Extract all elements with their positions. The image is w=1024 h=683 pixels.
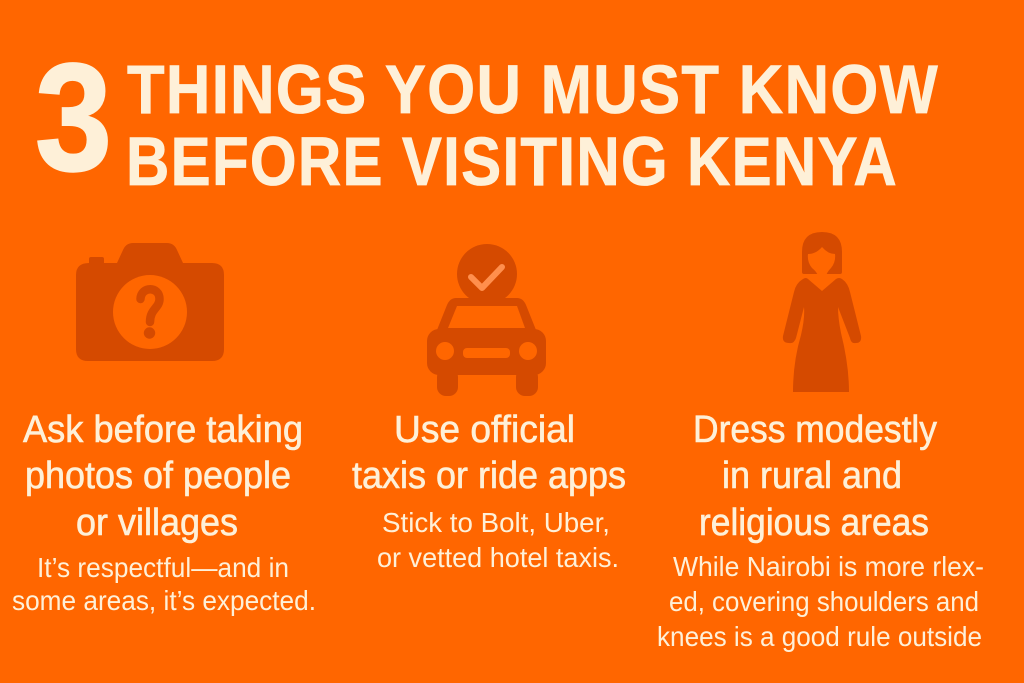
panel: tip 3 bbox=[657, 409, 984, 652]
title line 1: THINGS YOU MUST KNOW bbox=[127, 51, 939, 128]
panel: tip 2 bbox=[352, 409, 626, 573]
title bbox=[35, 32, 939, 203]
car bbox=[427, 298, 546, 396]
tip 3 heading bbox=[693, 409, 937, 544]
tip 1 body: It’s respectful—and in bbox=[37, 552, 289, 583]
hair bbox=[802, 232, 842, 274]
tip 1 heading: photos of people bbox=[25, 455, 291, 497]
tip 1 body: some areas, it’s expected. bbox=[12, 585, 316, 616]
icon: camera with question mark bbox=[76, 243, 224, 361]
tip 3 body: ed, covering shoulders and bbox=[669, 586, 979, 617]
panel: tip 1 bbox=[12, 409, 316, 616]
tip 3 heading: religious areas bbox=[699, 502, 929, 544]
icon: woman in modest dress bbox=[783, 232, 861, 392]
tip 2 body: or vetted hotel taxis. bbox=[377, 542, 619, 573]
tip 2 heading: Use official bbox=[394, 409, 575, 451]
tip 2 heading: taxis or ride apps bbox=[352, 455, 626, 497]
tip 2 body: Stick to Bolt, Uber, bbox=[382, 507, 610, 538]
tip 3 body: knees is a good rule outside bbox=[657, 621, 982, 652]
tip 1 heading: or villages bbox=[76, 502, 238, 544]
tip 2 heading bbox=[352, 409, 626, 497]
title numeral: 3 bbox=[35, 32, 112, 203]
icon: taxi with check mark bbox=[427, 244, 546, 396]
tip 1 body bbox=[12, 552, 316, 616]
tip 1 heading bbox=[23, 409, 303, 544]
tip 2 body bbox=[377, 507, 619, 573]
face bbox=[808, 247, 835, 276]
tip 1 heading: Ask before taking bbox=[23, 409, 303, 451]
tip 3 body: While Nairobi is more rlex- bbox=[673, 551, 984, 582]
title line 2: BEFORE VISITING KENYA bbox=[126, 123, 898, 200]
dress bbox=[783, 278, 861, 392]
tip 3 heading: in rural and bbox=[722, 455, 902, 497]
tip 3 heading: Dress modestly bbox=[693, 409, 937, 451]
tip 3 body bbox=[657, 551, 984, 652]
check badge bbox=[457, 244, 517, 304]
